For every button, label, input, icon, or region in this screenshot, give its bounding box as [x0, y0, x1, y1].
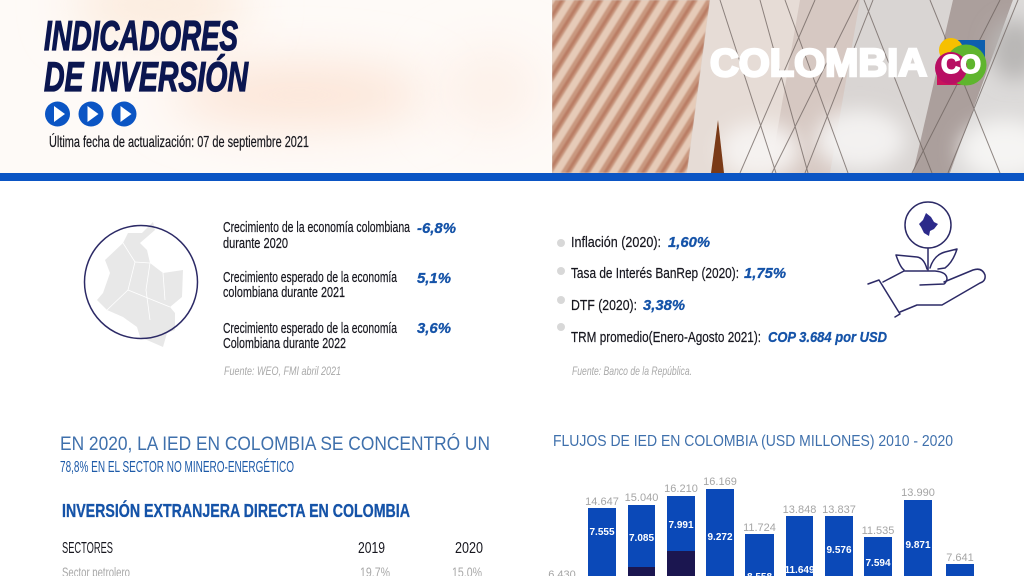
- bar 2019: 13.990: [901, 487, 935, 499]
- bar 2016: 11.649: [784, 565, 815, 576]
- growth 2021: [223, 269, 451, 301]
- bar 2011: 7.555: [589, 527, 615, 538]
- title: [44, 12, 249, 100]
- growth 2020: Crecimiento de la economía colombiana: [223, 219, 410, 236]
- interest rate: Tasa de Interés BanRep (2020):: [571, 265, 739, 282]
- table header row: 2019: [358, 540, 385, 557]
- bar 2011: [585, 496, 619, 576]
- table heading: INVERSIÓN EXTRANJERA DIRECTA EN COLOMBIA: [62, 500, 410, 521]
- bar 2012: 7.085: [629, 533, 654, 544]
- macro indicators list: [557, 234, 887, 346]
- source: WEO: Fuente: WEO, FMI abril 2021: [224, 364, 341, 378]
- bar 2019: [901, 487, 935, 576]
- bar 2014: [703, 476, 737, 576]
- inflation: Inflación (2020):: [571, 234, 661, 251]
- header photo: building facade: [552, 0, 1024, 180]
- bar 2013: 16.210: [664, 483, 698, 495]
- logo: Colombia CO: COLOMBIA: [710, 42, 927, 85]
- bar 2018: 11.535: [862, 525, 894, 537]
- title: DE INVERSIÓN: [44, 53, 249, 100]
- table row: petroleum sector: [62, 564, 482, 576]
- last update date: Última fecha de actualización: 07 de septiembre 2021: [49, 132, 309, 151]
- growth 2021: 5,1%: [417, 270, 451, 287]
- growth indicators: [223, 219, 456, 352]
- TRM: COP 3.684 por USD: [768, 329, 887, 346]
- bar 2017: [822, 504, 856, 576]
- stacked bar chart: IED flows: [548, 476, 974, 576]
- bar 2016: [783, 504, 816, 576]
- section heading: IED 2020: [60, 433, 490, 476]
- table header row: SECTORES: [62, 540, 113, 557]
- growth 2020: durante 2020: [223, 235, 288, 252]
- bar 2017: 9.576: [826, 545, 852, 556]
- inflation: 1,60%: [668, 234, 710, 251]
- interest rate: 1,75%: [744, 265, 786, 282]
- DTF: [557, 296, 685, 314]
- bar 2012: [625, 492, 658, 576]
- table header row: [62, 540, 483, 557]
- header background: peach gradient: [0, 0, 552, 173]
- bar 2015: 11.724: [743, 522, 776, 534]
- section heading: IED 2020: 78,8% EN EL SECTOR NO MINERO-ENERGÉTICO: [60, 457, 294, 476]
- TRM: [557, 323, 887, 346]
- bar 2014: 9.272: [707, 532, 733, 543]
- icon: Colombia map in circle: [84, 222, 198, 347]
- icon: hand holding plant: [868, 202, 985, 317]
- bar 2012: 15.040: [625, 492, 658, 504]
- logo: Colombia CO: CO: [941, 49, 981, 79]
- bar 2013: 7.991: [668, 520, 694, 531]
- section heading: IED 2020: EN 2020, LA IED EN COLOMBIA SE CONCENTRÓ UN: [60, 433, 490, 455]
- growth 2022: Crecimiento esperado de la economía: [223, 320, 397, 337]
- logo: Colombia CO: [710, 38, 986, 86]
- header blue rule: [0, 173, 1024, 181]
- bar 2016: 13.848: [783, 504, 816, 516]
- DTF: 3,38%: [643, 297, 685, 314]
- growth 2022: 3,6%: [417, 320, 451, 337]
- bar 2020: [946, 552, 974, 576]
- bar 2014: 16.169: [703, 476, 737, 488]
- bar 2011: 14.647: [585, 496, 619, 508]
- growth 2020: -6,8%: [417, 220, 456, 237]
- DTF: DTF (2020):: [571, 297, 637, 314]
- bar 2019: 9.871: [905, 540, 931, 551]
- growth 2022: Colombiana durante 2022: [223, 335, 346, 352]
- growth 2022: [223, 320, 451, 352]
- bar 2013: [664, 483, 698, 576]
- source: Banco de la República: Fuente: Banco de la República.: [572, 364, 692, 378]
- growth 2020: [223, 219, 456, 252]
- chart title: FLUJOS DE IED EN COLOMBIA (USD MILLONES) 2010 - 2020: [553, 433, 953, 450]
- bar 2018: 7.594: [865, 558, 891, 569]
- bar 2020: 7.641: [946, 552, 974, 564]
- growth 2021: colombiana durante 2021: [223, 284, 345, 301]
- title: INDICADORES: [44, 12, 238, 59]
- bar 2018: [862, 525, 894, 576]
- growth 2021: Crecimiento esperado de la economía: [223, 269, 397, 286]
- table header row: 2020: [455, 540, 483, 557]
- TRM: TRM promedio(Enero-Agosto 2021):: [571, 329, 761, 346]
- table: sectors: [62, 540, 483, 576]
- bar 2017: 13.837: [822, 504, 856, 516]
- bar 2015: [743, 522, 776, 576]
- icon: three play buttons: [45, 102, 136, 126]
